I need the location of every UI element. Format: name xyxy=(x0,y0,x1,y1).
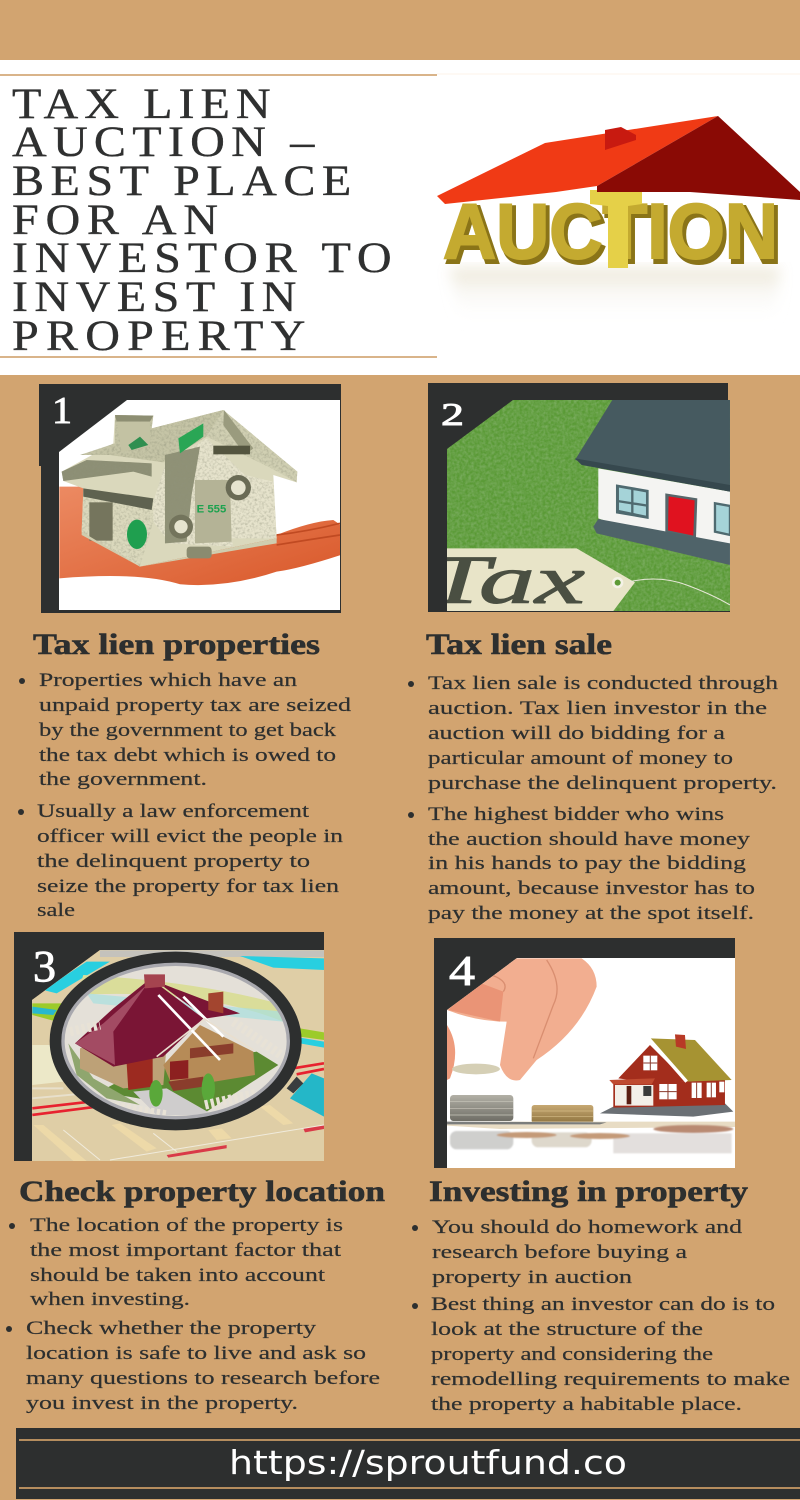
bullet list: the government. xyxy=(39,769,207,790)
number frame 2 xyxy=(428,383,730,612)
footer banner xyxy=(16,1428,800,1499)
icon: auction house xyxy=(437,116,800,325)
bullet list: location is safe to live and ask so xyxy=(26,1343,366,1364)
number frame 4 xyxy=(434,938,735,1168)
bullet list: research before buying a xyxy=(432,1242,688,1263)
image: house under magnifier on map xyxy=(32,950,324,1161)
bullet list: look at the structure of the xyxy=(431,1319,703,1340)
panel: check property location xyxy=(6,932,385,1414)
bullet list: property and considering the xyxy=(431,1344,713,1365)
number frame 3: 3 xyxy=(33,942,56,991)
bullet list xyxy=(18,670,352,921)
bullet list: auction. Tax lien investor in the xyxy=(428,698,767,719)
bullet list xyxy=(6,1215,380,1414)
title: FOR AN xyxy=(12,195,218,243)
bullet list: the auction should have money xyxy=(428,829,751,850)
bullet list: remodelling requirements to make xyxy=(431,1369,790,1390)
bullet list: the tax debt which is owed to xyxy=(39,745,336,766)
bullet list: The location of the property is xyxy=(30,1215,343,1236)
bullet list: Check whether the property xyxy=(26,1318,317,1339)
header panel xyxy=(0,60,800,375)
number frame 3 xyxy=(14,932,324,1161)
image: house on grass with tax tag: Tax xyxy=(427,542,585,618)
footer url: https://sproutfund.co xyxy=(229,1443,627,1482)
bullet list: particular amount of money to xyxy=(428,748,733,769)
number frame 2: 2 xyxy=(441,396,464,432)
bullet list: officer will evict the people in xyxy=(37,826,344,847)
image: house on grass with tax tag xyxy=(427,400,730,618)
image: money house on hand: E 555 xyxy=(197,503,226,515)
bullet list: pay the money at the spot itself. xyxy=(428,903,754,924)
title: INVEST IN xyxy=(12,272,296,320)
bullet list: in his hands to pay the bidding xyxy=(428,853,747,874)
icon: auction house: AUCTION xyxy=(446,190,781,279)
bullet list: the most important factor that xyxy=(30,1240,342,1261)
bullet list: purchase the delinquent property. xyxy=(428,773,777,794)
bullet list: the property a habitable place. xyxy=(431,1394,742,1415)
bullet list: You should do homework and xyxy=(432,1217,743,1238)
heading: Tax lien sale xyxy=(426,628,612,661)
heading: Check property location xyxy=(19,1175,385,1208)
bullet list: many questions to research before xyxy=(26,1368,380,1389)
bullet list: Tax lien sale is conducted through xyxy=(428,673,779,694)
bullet list: should be taken into account xyxy=(30,1265,326,1286)
bullet list: you invest in the property. xyxy=(26,1393,298,1414)
title: AUCTION – xyxy=(12,117,316,165)
number frame 1: 1 xyxy=(52,390,72,432)
bullet list: by the government to get back xyxy=(39,720,337,741)
bullet list: seize the property for tax lien xyxy=(37,876,340,897)
bullet list: sale xyxy=(37,900,75,921)
bullet list: Properties which have an xyxy=(39,670,298,691)
title: INVESTOR TO xyxy=(12,233,392,281)
image: hand placing coins beside house xyxy=(447,958,735,1168)
number frame 4: 4 xyxy=(449,949,475,995)
title xyxy=(12,79,392,359)
panel: tax lien sale xyxy=(408,383,779,924)
image: money house on hand xyxy=(59,400,341,610)
bullet list: property in auction xyxy=(432,1267,633,1288)
title: BEST PLACE xyxy=(12,156,351,204)
bullet list: the delinquent property to xyxy=(37,851,310,872)
heading: Investing in property xyxy=(429,1175,748,1208)
icon: auction house: AUCTION xyxy=(443,187,778,275)
bullet list: The highest bidder who wins xyxy=(428,804,724,825)
panel: tax lien properties xyxy=(18,384,352,921)
bullet list: when investing. xyxy=(30,1289,190,1310)
bullet list: auction will do bidding for a xyxy=(428,723,726,744)
number frame 1 xyxy=(39,384,341,613)
bullet list: Usually a law enforcement xyxy=(37,801,310,822)
heading: Tax lien properties xyxy=(33,628,320,661)
title: TAX LIEN xyxy=(12,79,271,127)
panel: investing in property xyxy=(412,938,790,1415)
bullet list xyxy=(412,1217,790,1415)
bullet list: amount, because investor has to xyxy=(428,878,755,899)
bullet list xyxy=(408,673,779,924)
bullet list: Best thing an investor can do is to xyxy=(431,1294,775,1315)
title: PROPERTY xyxy=(12,311,305,359)
bullet list: unpaid property tax are seized xyxy=(39,695,352,716)
